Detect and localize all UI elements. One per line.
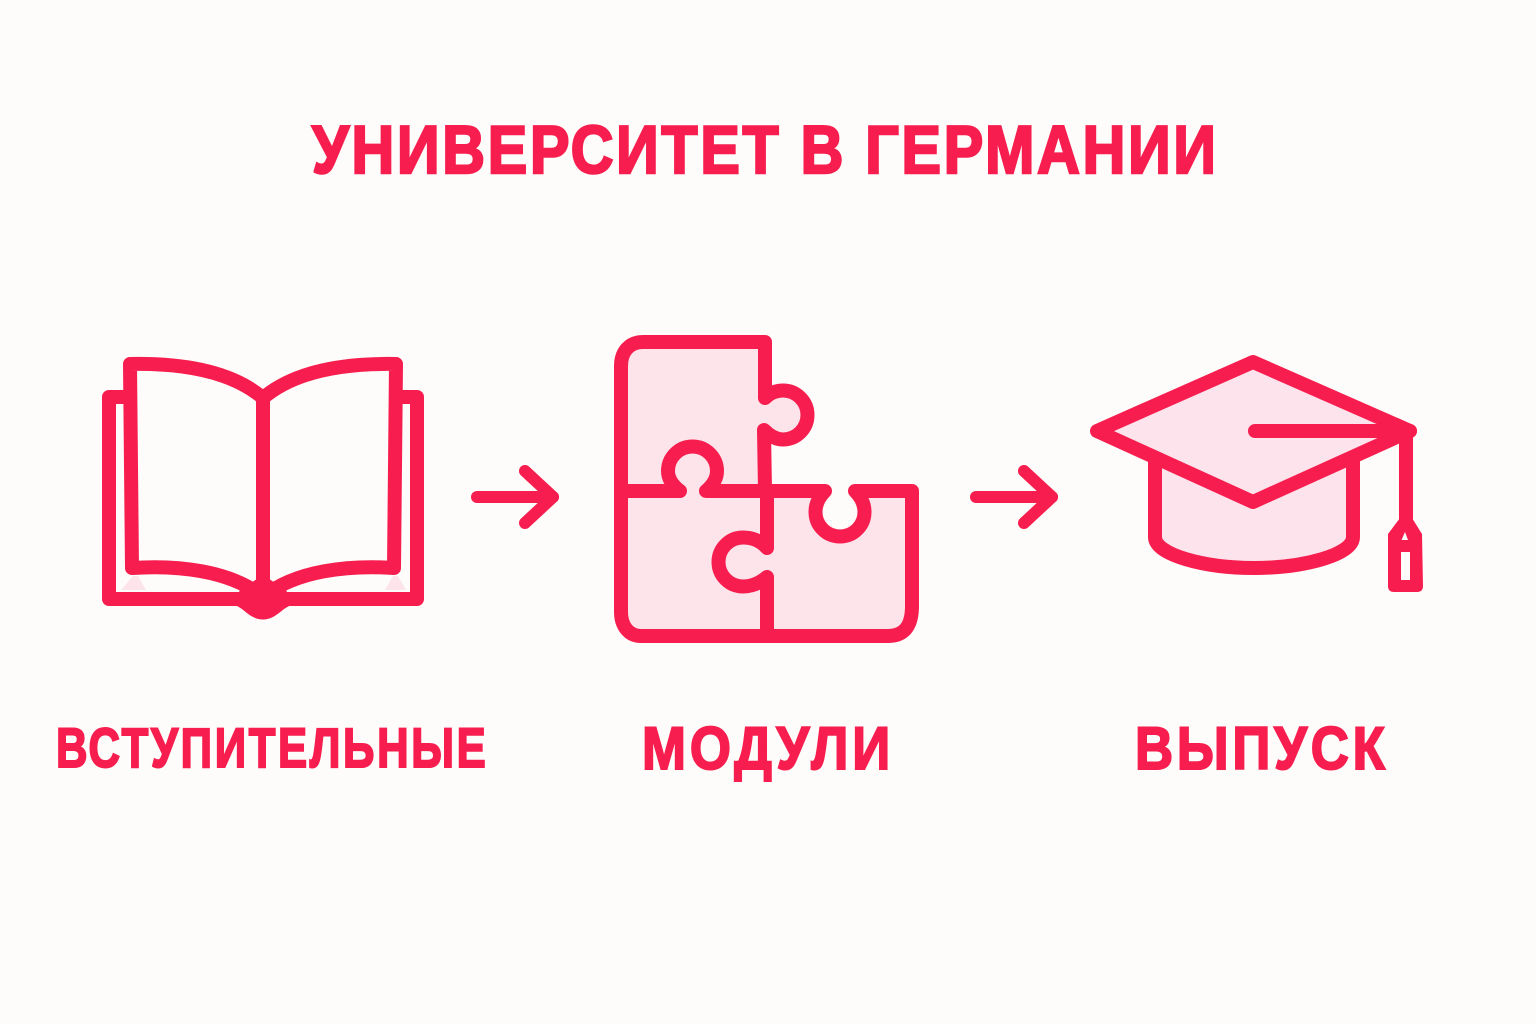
soft page shadows [121, 576, 406, 590]
puzzle inner seams [621, 446, 767, 636]
icon: graduation cap [1097, 362, 1423, 592]
label: вступительные: ВСТУПИТЕЛЬНЫЕ [56, 717, 486, 779]
tassel [1388, 518, 1423, 592]
mortarboard [1097, 362, 1410, 502]
icon: puzzle [621, 342, 912, 636]
label: модули: МОДУЛИ [642, 715, 890, 782]
icon: open book [109, 364, 417, 620]
arrow: book to modules [477, 471, 553, 523]
title: УНИВЕРСИТЕТ В ГЕРМАНИИ [312, 111, 1216, 188]
arrow: modules to graduation [976, 471, 1052, 523]
cap base [1155, 460, 1353, 568]
tassel cord [1255, 431, 1410, 522]
spine foot [233, 575, 293, 620]
book pages [130, 364, 396, 597]
label: выпуск: ВЫПУСК [1135, 715, 1385, 782]
book spine [256, 400, 270, 600]
book cover [109, 397, 417, 599]
puzzle outline [621, 342, 912, 636]
